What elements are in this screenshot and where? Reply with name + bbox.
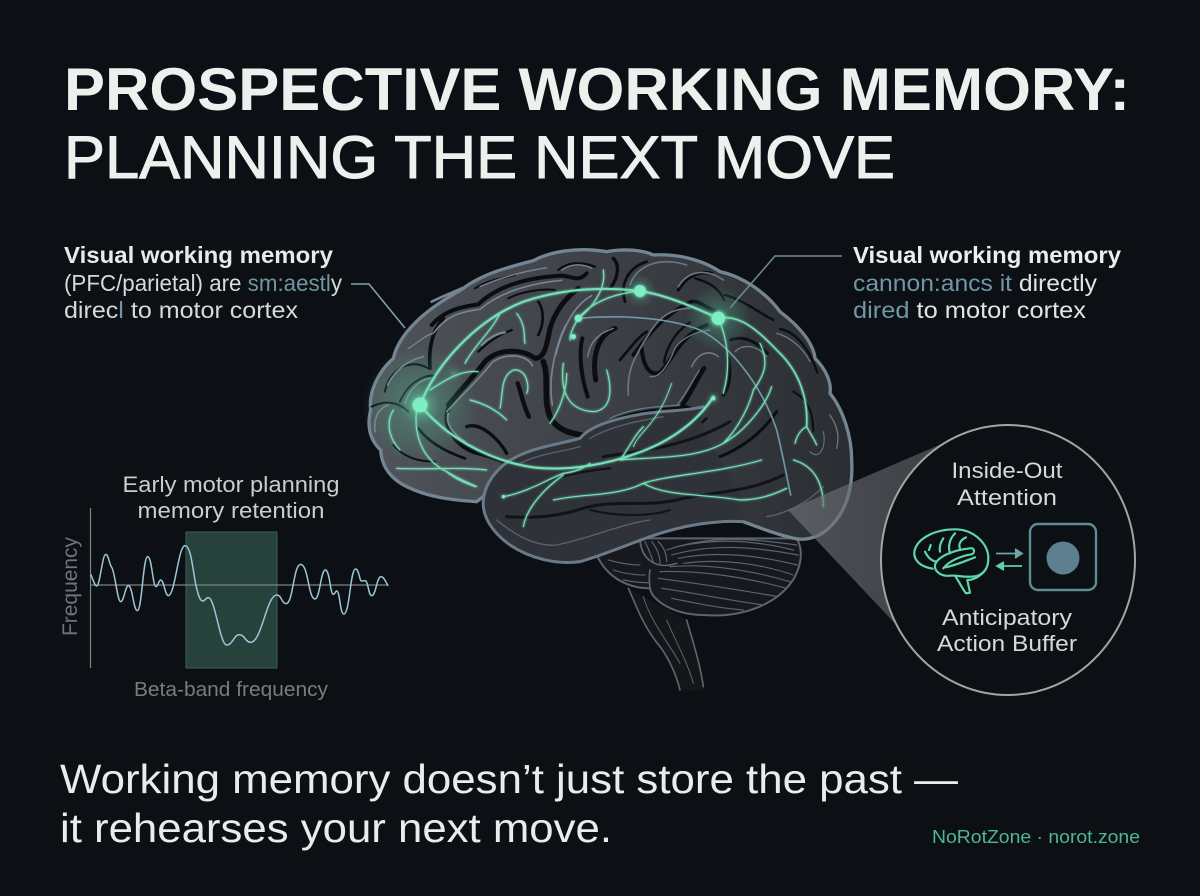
leader line: right (730, 256, 842, 308)
cerebellum (597, 538, 801, 615)
label: anticipatory action buffer (937, 605, 1077, 656)
label: anticipatory action buffer: Action Buffer (937, 631, 1077, 656)
callout: right annotation (853, 242, 1121, 323)
brain illustration (362, 250, 852, 690)
chart: beta-band frequency (59, 472, 388, 701)
heading: inside-out attention: Inside-Out (952, 458, 1062, 483)
icon: action buffer square (1030, 524, 1096, 590)
y axis label: Frequency (59, 537, 82, 636)
rim highlights: right (610, 262, 838, 455)
arrow: to buffer (996, 549, 1022, 558)
right hemisphere folds (610, 258, 838, 465)
dark sulci: right (610, 258, 817, 465)
heading: inside-out attention (952, 458, 1062, 510)
footer brand: NoRotZone · norot.zone (932, 827, 1140, 847)
callout: right annotation: Visual working memory (853, 242, 1121, 268)
label: anticipatory action buffer: Anticipatory (942, 605, 1072, 630)
icon: mini brain (914, 529, 988, 593)
callout: right annotation: dired to motor cortex (853, 297, 1087, 323)
callout: right annotation: cannon:ancs it directly (853, 270, 1098, 296)
blue pathway (578, 317, 791, 495)
chart title: memory retention (138, 498, 324, 523)
panel: zoom circle (881, 425, 1135, 695)
cerebrum (369, 250, 852, 539)
hindbrain (369, 250, 852, 690)
green neural pathways (389, 270, 823, 527)
axes (90, 508, 388, 668)
title: PLANNING THE NEXT MOVE (64, 124, 895, 191)
title: PROSPECTIVE WORKING MEMORY: (64, 56, 1130, 123)
activation nodes (413, 285, 725, 498)
callout: left annotation: (PFC/parietal) are sm:aestly (64, 270, 342, 296)
takeaway: Working memory doesn’t just store the past — (60, 756, 958, 802)
neural glow (362, 274, 752, 463)
highlighted band (186, 532, 277, 668)
temporal lobe (362, 270, 823, 563)
rim highlights: left (375, 265, 613, 442)
x axis label: Beta-band frequency (134, 679, 328, 701)
callout: left annotation (64, 242, 342, 323)
heading: inside-out attention: Attention (957, 485, 1057, 510)
chart title (122, 472, 340, 523)
leader line: left (351, 284, 405, 328)
chart title: Early motor planning (122, 472, 340, 497)
brain stem outline (628, 588, 703, 690)
dark sulci: left (372, 263, 615, 467)
callout: left annotation: direcl to motor cortex (64, 297, 299, 323)
zoom cone (788, 436, 960, 650)
waveform (91, 546, 388, 645)
takeaway: it rehearses your next move. (60, 805, 612, 851)
callout: left annotation: Visual working memory (64, 242, 333, 268)
temporal lobe outline (483, 407, 743, 563)
takeaway (60, 756, 958, 851)
brain stem (628, 588, 703, 690)
temporal folds (497, 417, 823, 545)
left hemisphere folds (372, 263, 615, 467)
title (64, 56, 1130, 191)
arrow: to brain (997, 562, 1022, 570)
